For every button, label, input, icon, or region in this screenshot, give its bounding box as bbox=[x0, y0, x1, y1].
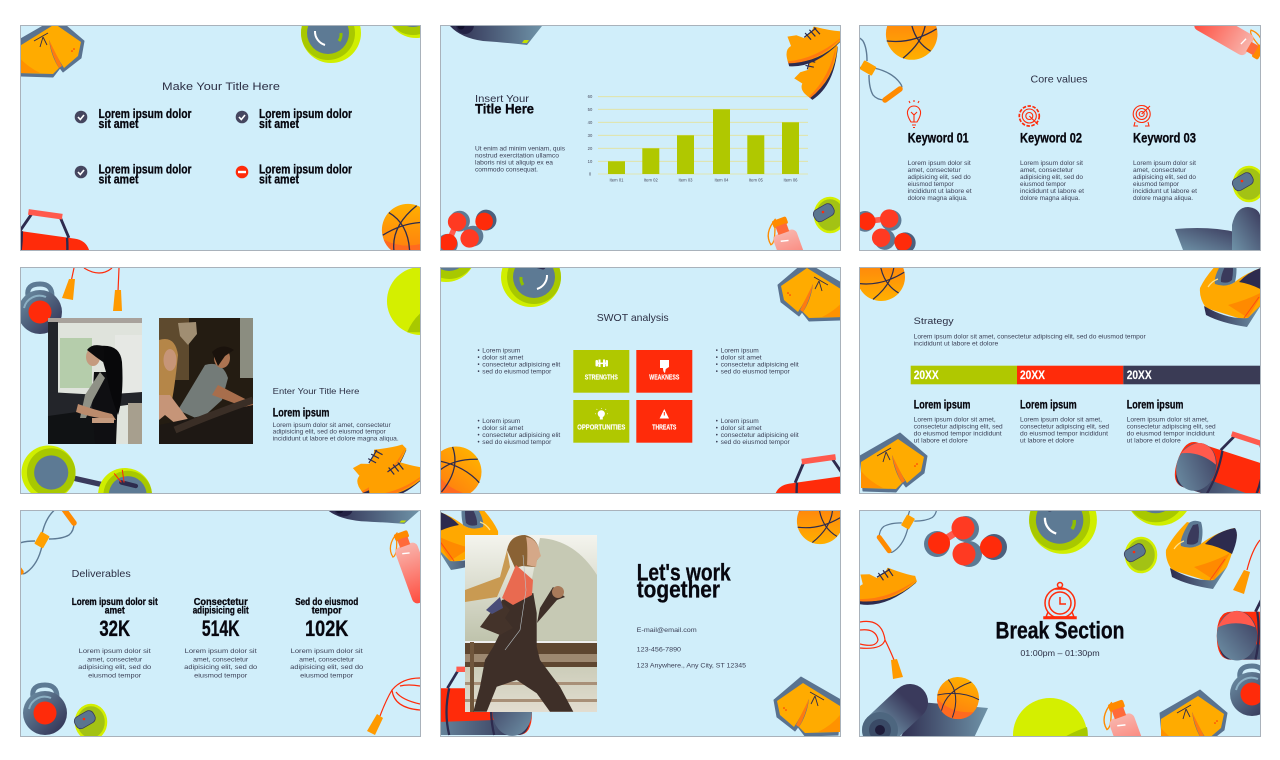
checklist item 2: Lorem ipsum dolor bbox=[259, 107, 352, 121]
timeline bar segment 1: 20XX bbox=[914, 368, 939, 382]
bullet list: weakness: • bbox=[716, 356, 718, 362]
icon: shorts bbox=[860, 433, 927, 492]
value column 2: eiusmod tempor bbox=[1020, 182, 1066, 188]
strategy column 1: do eiusmod tempor incididunt bbox=[914, 431, 1002, 437]
icon: barbell bbox=[21, 446, 152, 522]
slide 7: deliverables bbox=[10, 504, 436, 739]
slide 4: two photos with text bbox=[21, 268, 420, 493]
bullet list: threats bbox=[716, 419, 799, 446]
deliverable column 2: 514K bbox=[202, 616, 240, 641]
bar chart: 60 bbox=[588, 94, 593, 99]
photo: people on exercise bikes bbox=[159, 318, 253, 444]
contact details: E-mail@email.com bbox=[637, 628, 697, 634]
value column 3 bbox=[1133, 130, 1197, 202]
text block: adipisicing elit, sed do eiusmod tempor bbox=[273, 430, 386, 436]
heading: Title Here bbox=[475, 100, 534, 116]
icon: shoe bbox=[854, 564, 919, 607]
value column 3: Keyword 03 bbox=[1133, 130, 1196, 146]
icon: shorts bbox=[1160, 690, 1227, 749]
paragraph: Ut enim ad minim veniam, quis bbox=[475, 146, 565, 152]
icon: barbell bbox=[416, 222, 561, 307]
icon: yoga mat bbox=[862, 702, 988, 748]
icon: basketball bbox=[420, 436, 492, 508]
icon: yoga mat bbox=[329, 504, 419, 524]
icon: basketball bbox=[797, 498, 843, 544]
paragraph: commodo consequat. bbox=[475, 168, 538, 174]
strategy column 2: Lorem ipsum bbox=[1020, 397, 1077, 411]
slide 8: contact bbox=[424, 498, 843, 736]
bullet list: threats: • bbox=[716, 440, 718, 446]
icon: barbell bbox=[301, 26, 420, 63]
icon: water bottle bbox=[1194, 26, 1260, 60]
value column 1: Lorem ipsum dolor sit bbox=[908, 161, 971, 167]
text block: incididunt ut labore et dolore magna aliqua. bbox=[273, 437, 399, 443]
strategy column 2: Lorem ipsum dolor sit amet, bbox=[1020, 417, 1102, 423]
bullet list: strengths: sed do eiusmod tempor bbox=[482, 370, 551, 376]
panel background bbox=[860, 511, 1260, 736]
icon: basketball bbox=[886, 26, 938, 60]
time range: 01:00pm – 01:30pm bbox=[1020, 649, 1100, 658]
heading: Core values bbox=[1030, 74, 1088, 86]
deliverable column 3: 102K bbox=[305, 616, 348, 641]
checklist item 4: Lorem ipsum dolor bbox=[259, 162, 352, 176]
intro text: Lorem ipsum dolor sit amet, consectetur adipiscing elit, sed do eiusmod tempor bbox=[914, 334, 1146, 340]
bullet list: opportunities: • bbox=[478, 426, 480, 432]
panel background bbox=[441, 26, 840, 250]
value column 2: incididunt ut labore et bbox=[1020, 189, 1084, 195]
deliverable column 3 bbox=[290, 597, 364, 679]
deliverable column 3: tempor bbox=[312, 605, 342, 616]
panel background bbox=[21, 511, 420, 736]
checklist item 4 bbox=[236, 164, 352, 184]
strategy column 2: ut labore et dolore bbox=[1020, 438, 1075, 444]
checklist item 3: sit amet bbox=[98, 172, 139, 186]
bullet list: weakness: dolor sit amet bbox=[721, 356, 762, 362]
heading: Strategy bbox=[914, 316, 954, 327]
icon: resistance band bbox=[10, 506, 74, 574]
icon: dumbbells bbox=[860, 209, 916, 250]
strategy column 2 bbox=[1020, 397, 1109, 444]
icon: sports bra bbox=[1200, 259, 1271, 327]
bullet list: opportunities: consectetur adipisicing elit bbox=[482, 433, 561, 439]
panel background bbox=[441, 511, 840, 736]
icon: fitness band bbox=[1122, 538, 1156, 572]
icon: gym bag bbox=[424, 667, 532, 736]
icon: gym bag bbox=[1170, 418, 1280, 517]
checklist item 1: Lorem ipsum dolor bbox=[98, 107, 192, 121]
bullet list: strengths: • bbox=[478, 370, 480, 376]
SWOT box: strengths bbox=[573, 350, 629, 393]
checklist item 2 bbox=[236, 108, 352, 128]
bullet list: threats: consectetur adipisicing elit bbox=[721, 433, 799, 439]
SWOT box: opportunities: OPPORTUNITIES bbox=[577, 422, 625, 432]
bar chart: 40 bbox=[588, 120, 593, 125]
deliverable column 1: Lorem ipsum dolor sit bbox=[72, 597, 158, 608]
deliverable column 2: amet, consectetur bbox=[193, 657, 248, 663]
deliverable column 1: 32K bbox=[99, 616, 130, 641]
value column 1: amet, consectetur bbox=[908, 168, 961, 174]
bar chart: Item 05 bbox=[749, 178, 763, 182]
icon: jump rope bbox=[62, 268, 122, 311]
bullet list: weakness: Lorem ipsum bbox=[721, 349, 759, 355]
icon: archery target bbox=[1133, 106, 1150, 126]
deliverable column 1: adipisicing elit, sed do bbox=[78, 665, 152, 671]
strategy column 2: do eiusmod tempor incididunt bbox=[1020, 431, 1108, 437]
icon: pair of shoes bbox=[346, 434, 431, 502]
SWOT box: weakness: WEAKNESS bbox=[649, 372, 679, 382]
bullet list: strengths bbox=[478, 349, 561, 376]
bar chart: Item 04 bbox=[715, 178, 729, 182]
value column 3: Lorem ipsum dolor sit bbox=[1133, 161, 1196, 167]
heading: Let's work bbox=[637, 560, 731, 587]
icon: gym ball bbox=[1013, 698, 1088, 760]
icon: gym bag bbox=[1217, 590, 1280, 661]
value column 1: adipisicing elit, sed do bbox=[908, 175, 971, 181]
checklist item 4: sit amet bbox=[259, 172, 300, 186]
strategy column 3: do eiusmod tempor incididunt bbox=[1127, 431, 1215, 437]
slide 9: break section bbox=[854, 458, 1280, 760]
text block: Lorem ipsum dolor sit amet, consectetur bbox=[273, 423, 391, 429]
intro text: incididunt ut labore et dolore bbox=[914, 342, 999, 348]
icon: pair of shoes bbox=[786, 26, 840, 100]
icon: light bulb bbox=[907, 100, 921, 128]
icon: fitness band bbox=[72, 705, 106, 739]
bar chart: Item 02 bbox=[644, 178, 658, 182]
photo: woman on treadmill bbox=[48, 318, 142, 444]
bullet list: threats: Lorem ipsum bbox=[721, 419, 759, 425]
bullet list: strengths: • bbox=[478, 349, 480, 355]
icon: dumbbells bbox=[924, 516, 1007, 567]
contact details bbox=[637, 628, 747, 670]
SWOT box: threats: THREATS bbox=[652, 422, 676, 432]
paragraph: nostrud exercitation ullamco bbox=[475, 154, 560, 160]
heading: together bbox=[637, 576, 720, 603]
timeline bar segment 3 bbox=[1123, 366, 1260, 384]
text block: Enter Your Title Here bbox=[273, 387, 360, 396]
value column 3: eiusmod tempor bbox=[1133, 182, 1179, 188]
contact details: 123-456-7890 bbox=[637, 647, 682, 653]
icon: water bottle bbox=[768, 216, 804, 250]
value column 1: eiusmod tempor bbox=[908, 182, 954, 188]
value column 1: Keyword 01 bbox=[908, 130, 969, 146]
checklist item 3: Lorem ipsum dolor bbox=[98, 162, 192, 176]
panel background bbox=[21, 268, 420, 493]
timeline bar segment 2: 20XX bbox=[1020, 368, 1045, 382]
checklist item 1: sit amet bbox=[98, 117, 139, 131]
SWOT box: strengths: STRENGTHS bbox=[585, 372, 618, 382]
photo: woman running bbox=[465, 535, 597, 712]
bar chart: Item 01 bbox=[610, 178, 624, 182]
icon: resistance band bbox=[879, 492, 937, 552]
heading: Break Section bbox=[996, 618, 1124, 645]
deliverable column 1: amet bbox=[105, 605, 125, 616]
strategy column 1: consectetur adipiscing elit, sed bbox=[914, 424, 1003, 430]
checklist item 3 bbox=[74, 164, 192, 184]
value column 2: amet, consectetur bbox=[1020, 168, 1073, 174]
icon: gear with target bbox=[1019, 106, 1039, 126]
bullet list: weakness: sed do eiusmod tempor bbox=[721, 370, 790, 376]
bullet list: weakness bbox=[716, 349, 799, 376]
paragraph: laboris nisi ut aliquip ex ea bbox=[475, 161, 554, 167]
panel background bbox=[860, 26, 1260, 250]
slide 3: core values bbox=[860, 26, 1260, 250]
strategy column 3: Lorem ipsum dolor sit amet, bbox=[1127, 417, 1209, 423]
icon: dumbbells bbox=[441, 210, 496, 250]
deliverable column 2: Consectetur bbox=[194, 597, 248, 608]
icon: kettlebell bbox=[23, 685, 67, 735]
bar chart: 0 bbox=[589, 172, 592, 176]
icon: kettlebell bbox=[1230, 666, 1274, 716]
icon: fitness band bbox=[1230, 167, 1264, 201]
text block bbox=[273, 387, 399, 443]
bullet list: threats: sed do eiusmod tempor bbox=[721, 440, 790, 446]
icon: shorts bbox=[21, 26, 84, 78]
bullet list: weakness: • bbox=[716, 363, 718, 369]
icon: jump rope top right bbox=[1233, 540, 1260, 594]
deliverable column 3: adipisicing elit, sed do bbox=[290, 665, 364, 671]
icon: basketball bbox=[857, 253, 905, 301]
deliverable column 3: Lorem ipsum dolor sit bbox=[291, 649, 363, 655]
value column 2: adipisicing elit, sed do bbox=[1020, 175, 1084, 181]
icon: jump rope left bbox=[860, 621, 903, 679]
icon: shorts bbox=[778, 262, 845, 321]
value column 2: dolore magna aliqua. bbox=[1020, 196, 1080, 202]
bar chart bbox=[588, 94, 808, 182]
strategy column 1: Lorem ipsum bbox=[914, 397, 970, 411]
bullet list: opportunities: sed do eiusmod tempor bbox=[482, 440, 551, 446]
slide 6: strategy timeline bbox=[857, 253, 1280, 517]
icon: basketball bbox=[382, 204, 420, 250]
icon: barbell bbox=[1029, 458, 1193, 554]
panel background bbox=[441, 268, 840, 493]
deliverable column 1: eiusmod tempor bbox=[88, 673, 141, 679]
strategy column 1: ut labore et dolore bbox=[914, 438, 968, 444]
SWOT box: opportunities bbox=[573, 400, 629, 443]
icon: water bottle bbox=[1098, 697, 1155, 760]
panel background bbox=[860, 268, 1260, 493]
deliverable column 1: Lorem ipsum dolor sit bbox=[79, 649, 151, 655]
bar chart: 50 bbox=[588, 107, 593, 112]
bullet list: opportunities: • bbox=[478, 440, 480, 446]
checklist item 2: sit amet bbox=[259, 117, 300, 131]
deliverable column 2: adipisicing elit bbox=[193, 605, 249, 616]
strategy column 1 bbox=[914, 397, 1003, 444]
icon: gym bag bbox=[767, 448, 891, 536]
bullet list: threats: dolor sit amet bbox=[721, 426, 762, 432]
icon: gym ball bbox=[387, 267, 456, 335]
icon: resistance band bbox=[860, 38, 903, 103]
bar chart: Item 06 bbox=[784, 178, 798, 182]
bullet list: weakness: • bbox=[716, 349, 718, 355]
deliverable column 2: eiusmod tempor bbox=[194, 673, 247, 679]
bullet list: opportunities: dolor sit amet bbox=[482, 426, 524, 432]
bullet list: weakness: consectetur adipisicing elit bbox=[721, 363, 799, 369]
deliverable column 2: adipisicing elit, sed do bbox=[184, 665, 258, 671]
heading bbox=[475, 95, 534, 114]
bullet list: opportunities bbox=[478, 419, 561, 446]
bullet list: threats: • bbox=[716, 433, 718, 439]
heading: SWOT analysis bbox=[597, 312, 669, 324]
value column 3: dolore magna aliqua. bbox=[1133, 196, 1193, 202]
SWOT box: weakness bbox=[636, 350, 692, 393]
deliverable column 2: Lorem ipsum dolor sit bbox=[185, 649, 257, 655]
value column 1: incididunt ut labore et bbox=[908, 189, 972, 195]
strategy column 1: Lorem ipsum dolor sit amet, bbox=[914, 417, 996, 423]
contact details: 123 Anywhere., Any City, ST 12345 bbox=[637, 664, 747, 670]
deliverable column 3: Sed do eiusmod bbox=[295, 597, 358, 608]
text block: Lorem ipsum bbox=[273, 406, 329, 420]
icon: fitness band bbox=[812, 196, 840, 234]
value column 2: Lorem ipsum dolor sit bbox=[1020, 161, 1083, 167]
bar chart: 10 bbox=[588, 159, 593, 164]
icon: yoga mat bbox=[1175, 207, 1260, 250]
slide 1: title and checklist bbox=[21, 26, 420, 250]
value column 3: amet, consectetur bbox=[1133, 168, 1186, 174]
deliverable column 3: eiusmod tempor bbox=[300, 673, 353, 679]
slide 5: SWOT analysis bbox=[416, 222, 891, 536]
value column 2: Keyword 02 bbox=[1020, 130, 1082, 146]
icon: water bottle bbox=[385, 528, 436, 606]
value column 1: dolore magna aliqua. bbox=[908, 196, 968, 202]
bar chart: Item 03 bbox=[679, 178, 693, 182]
icon: stopwatch bbox=[1044, 582, 1076, 618]
bullet list: opportunities: • bbox=[478, 433, 480, 439]
bullet list: strengths: dolor sit amet bbox=[482, 356, 524, 362]
icon: sports bra bbox=[427, 502, 498, 570]
intro text bbox=[914, 334, 1146, 348]
heading: Deliverables bbox=[72, 569, 131, 580]
panel background bbox=[21, 26, 420, 250]
heading bbox=[637, 560, 731, 603]
bullet list: weakness: • bbox=[716, 370, 718, 376]
heading: Insert Your bbox=[475, 93, 530, 105]
bullet list: opportunities: • bbox=[478, 419, 480, 425]
icon: basketball bbox=[931, 671, 985, 725]
bar chart: 20 bbox=[588, 146, 593, 151]
bullet list: strengths: consectetur adipisicing elit bbox=[482, 363, 561, 369]
strategy column 3 bbox=[1127, 397, 1216, 444]
value column 2 bbox=[1020, 130, 1084, 202]
bullet list: threats: • bbox=[716, 419, 718, 425]
icon: jump rope bbox=[367, 678, 420, 735]
value column 1 bbox=[908, 130, 972, 202]
bullet list: opportunities: Lorem ipsum bbox=[482, 419, 520, 425]
icon: shorts bbox=[774, 677, 841, 736]
strategy column 2: consectetur adipiscing elit, sed bbox=[1020, 424, 1109, 430]
timeline bar segment 2 bbox=[1017, 366, 1123, 384]
icon: sports bra bbox=[1166, 521, 1237, 589]
bar chart: 30 bbox=[588, 133, 593, 138]
value column 3: adipisicing elit, sed do bbox=[1133, 175, 1197, 181]
strategy column 3: ut labore et dolore bbox=[1127, 438, 1181, 444]
paragraph bbox=[475, 146, 565, 174]
deliverable column 2 bbox=[184, 597, 258, 679]
bullet list: strengths: • bbox=[478, 356, 480, 362]
icon: gym bag bbox=[21, 209, 89, 250]
bullet list: strengths: • bbox=[478, 363, 480, 369]
bullet list: strengths: Lorem ipsum bbox=[482, 349, 520, 355]
value column 3: incididunt ut labore et bbox=[1133, 189, 1197, 195]
slide 2: bar chart bbox=[441, 26, 840, 250]
bullet list: threats: • bbox=[716, 426, 718, 432]
strategy column 3: consectetur adipiscing elit, sed bbox=[1127, 424, 1216, 430]
deliverable column 3: amet, consectetur bbox=[299, 657, 354, 663]
deliverable column 1 bbox=[72, 597, 158, 679]
icon: yoga mat bbox=[450, 26, 542, 45]
checklist item 1 bbox=[74, 108, 192, 128]
timeline bar segment 1 bbox=[911, 366, 1017, 384]
timeline bar segment 3: 20XX bbox=[1127, 368, 1152, 382]
deliverable column 1: amet, consectetur bbox=[87, 657, 142, 663]
title: Make Your Title Here bbox=[162, 81, 280, 93]
SWOT box: threats bbox=[636, 400, 692, 443]
strategy column 3: Lorem ipsum bbox=[1127, 397, 1183, 411]
icon: kettlebell bbox=[18, 284, 62, 334]
